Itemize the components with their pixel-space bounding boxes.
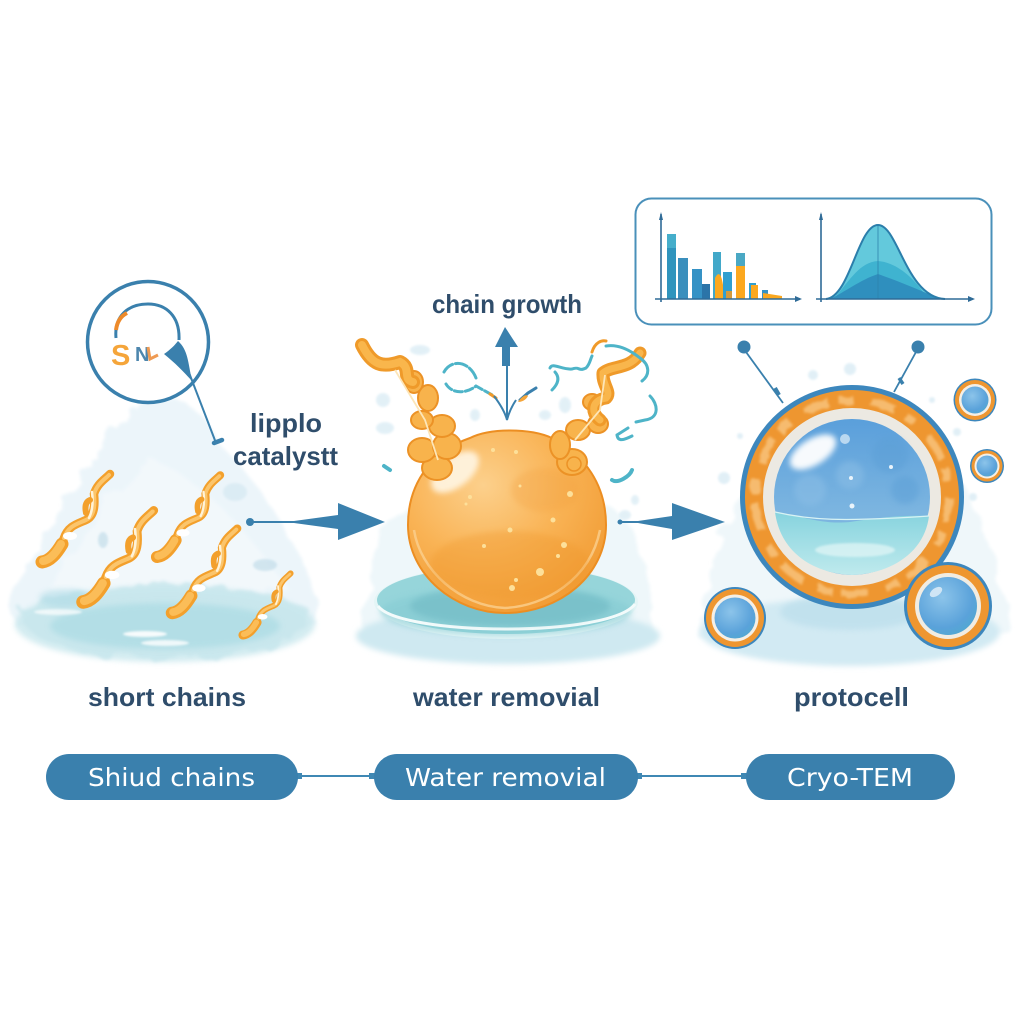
bell curve chart [816,212,975,302]
molecule arc [116,304,179,340]
interior mottling [794,437,919,506]
magnifier callout: lipid catalyst: N [135,344,149,366]
panel: charts [636,198,992,324]
magnifier callout: lipid catalyst [88,282,222,443]
pill: short chains: Shiud chains [88,763,255,792]
right orange chain [550,353,640,475]
panel: water removal sphere on dish [356,430,660,664]
teal chain fragments [384,341,656,481]
text: stage label protocell: protocell [794,682,909,712]
short chain worms [42,474,291,635]
pill: cryo-TEM [746,754,955,800]
watercolor wash [698,470,1012,640]
stray droplets [718,363,977,501]
arrow: water removal to protocell [618,503,725,540]
left orange chain [362,345,461,480]
floating water droplets around sphere [376,345,639,520]
connector lines between pills [296,773,748,779]
pill: cryo-TEM: Cryo-TEM [787,763,913,792]
small protocell right [970,449,1004,483]
molecule labels: S [111,340,130,372]
small protocell bottom left [704,587,766,649]
text: lipid catalyst label: catalystt [233,441,338,471]
text: stage label short chains: short chains [88,682,246,712]
large protocell [740,385,964,609]
bar chart axes [655,214,800,302]
bar chart [655,212,802,302]
arrow: short chains to water removal [246,503,385,540]
pins [738,340,924,403]
text: stage label water removal: water removial [412,682,600,712]
teal dish [374,565,638,639]
pill: water removal: Water removial [405,763,606,792]
arrow: chain growth upward [494,327,518,420]
bell chart axes [816,214,973,302]
sphere speckles [464,448,573,591]
pill: short chains [46,754,298,800]
watercolor mound [12,398,316,658]
panel: protocell [698,340,1012,666]
panel: short chains water mound [12,398,316,662]
orange fragment [518,395,528,402]
watercolor wash [362,500,652,630]
pill: water removal [374,754,638,800]
small protocell bottom right [904,562,992,650]
text: chain growth: chain growth [432,289,582,319]
orange sphere [408,430,606,613]
text: lipid catalyst label [233,408,338,471]
text: lipid catalyst label: lipplo [250,408,322,438]
small protocell top right [954,378,996,422]
pointer blob [164,341,192,381]
